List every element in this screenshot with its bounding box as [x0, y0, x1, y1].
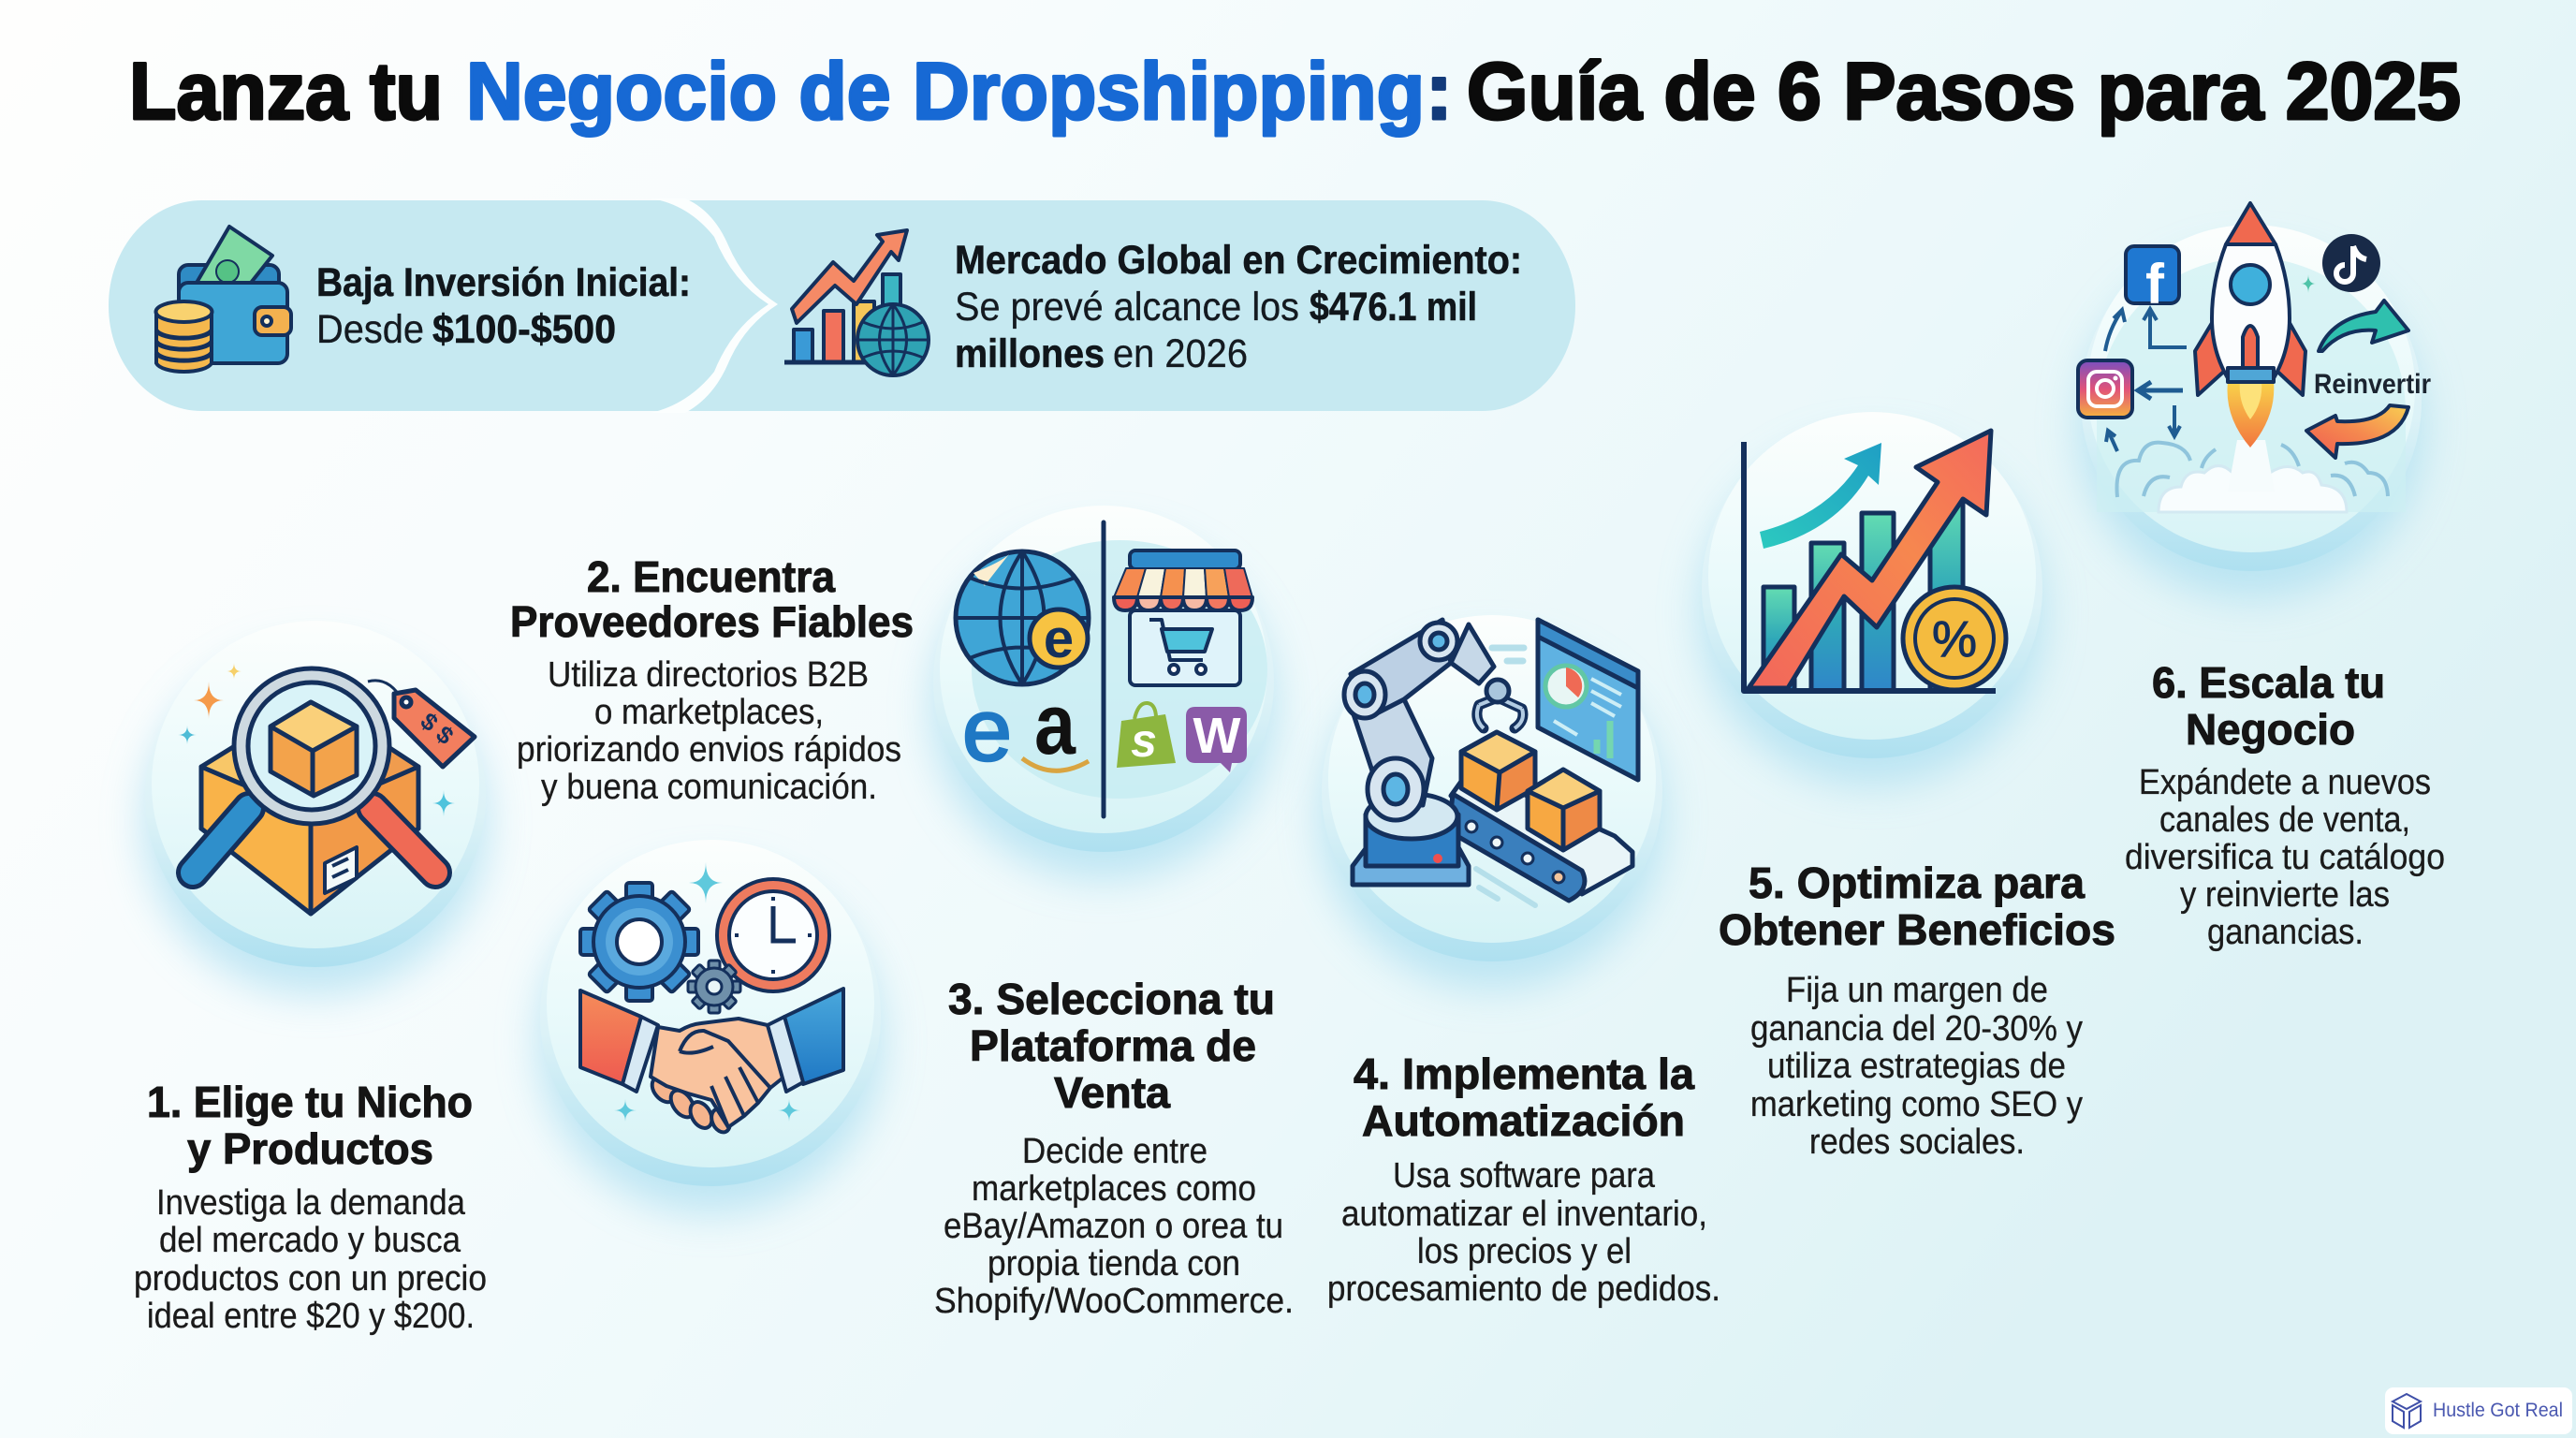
icon: large gear — [580, 883, 698, 1001]
step 1 disc and icon — [143, 621, 488, 994]
logo: Amazon a: a — [1034, 677, 1076, 772]
icon: storefront with cart — [1114, 550, 1252, 685]
icon: cube — [2393, 1394, 2421, 1428]
body: Expándete a nuevos — [2139, 763, 2431, 802]
icon: flame — [2228, 382, 2275, 492]
step 6 disc and icon — [2078, 203, 2431, 598]
watermark badge — [2385, 1387, 2572, 1434]
text: low investment — [316, 260, 691, 352]
body: ideal entre $20 y $200. — [147, 1297, 475, 1336]
heading: 3. Selecciona tu — [948, 975, 1275, 1023]
body: automatizar el inventario, — [1341, 1195, 1707, 1234]
body: y reinvierte las — [2180, 875, 2390, 915]
heading: Negocio — [2186, 705, 2355, 754]
body: Investiga la demanda — [156, 1183, 466, 1223]
logo: WooCommerce: W — [1193, 708, 1241, 764]
text: global market: en 2026 — [1113, 331, 1248, 376]
body: eBay/Amazon o orea tu — [944, 1207, 1283, 1246]
body: marketing como SEO y — [1750, 1085, 2083, 1124]
step 6 text — [2125, 658, 2445, 952]
step 5 disc and icon — [1700, 412, 2044, 785]
dash marks — [1492, 648, 1524, 661]
sparkles — [178, 663, 455, 816]
body: y buena comunicación. — [541, 768, 877, 807]
body: canales de venta, — [2159, 800, 2410, 840]
body — [517, 655, 901, 807]
icon: Instagram — [2078, 360, 2132, 418]
divider — [1101, 522, 1106, 816]
heading: 1. Elige tu Nicho — [147, 1078, 473, 1126]
heading: 5. Optimiza para — [1749, 858, 2085, 907]
icon: conveyor belt — [1449, 770, 1632, 901]
body: Utiliza directorios B2B — [548, 655, 869, 695]
body: del mercado y busca — [159, 1221, 461, 1260]
step 3 text — [934, 975, 1294, 1321]
icon: box, magnifier and price tag — [193, 668, 475, 914]
body — [134, 1183, 487, 1336]
title: Negocio de Dropshipping — [466, 47, 1425, 137]
body: ganancia del 20-30% y — [1750, 1009, 2083, 1049]
price tag symbols: $ $ — [415, 707, 460, 750]
body: Shopify/WooCommerce. — [934, 1282, 1294, 1321]
arrow: red reinvest — [2306, 405, 2408, 458]
icon: Facebook — [2126, 246, 2179, 315]
icon: handshake — [580, 989, 843, 1136]
logo: Shopify bag — [1117, 703, 1176, 768]
stats banner — [109, 198, 1575, 413]
speed lines — [1476, 869, 1535, 905]
title: Lanza tu — [129, 47, 443, 137]
logo: eBay e: e — [962, 681, 1012, 779]
heading: Obtener Beneficios — [1719, 905, 2115, 954]
body: los precios y el — [1417, 1232, 1632, 1271]
heading: Automatización — [1362, 1096, 1685, 1145]
heading — [1354, 1049, 1694, 1145]
body: Fija un margen de — [1786, 971, 2048, 1010]
e badge letter: e — [1044, 609, 1074, 669]
icon: bar chart with arrows and percent coin — [1744, 431, 2006, 691]
heading — [948, 975, 1275, 1117]
title: : — [1426, 47, 1453, 137]
body: marketplaces como — [972, 1169, 1256, 1209]
heading: 6. Escala tu — [2152, 658, 2385, 707]
logo: Shopify bag: s — [1131, 714, 1157, 767]
heading: 4. Implementa la — [1354, 1049, 1694, 1098]
step 5 text — [1719, 858, 2115, 1162]
body: utiliza estrategias de — [1767, 1047, 2066, 1086]
text: global market: Se prevé alcance los — [955, 285, 1299, 330]
icon: rocket — [2195, 203, 2305, 395]
text: low investment: Desde — [316, 307, 424, 352]
icon: dashboard screen — [1538, 620, 1638, 780]
body: Decide entre — [1022, 1132, 1208, 1171]
icon: clock — [717, 879, 829, 991]
body — [934, 1132, 1294, 1321]
text: global market — [955, 238, 1522, 376]
sparkle — [2301, 274, 2316, 293]
icon: wallet with coins — [155, 227, 291, 372]
heading — [2152, 658, 2385, 754]
arrow: teal reinvest — [2319, 301, 2408, 351]
watermark text: Hustle Got Real — [2433, 1400, 2563, 1421]
heading: Plataforma de — [970, 1021, 1256, 1070]
body: Usa software para — [1393, 1156, 1656, 1196]
text: global market: $476.1 mil — [1310, 285, 1477, 330]
title — [129, 47, 2461, 137]
logo: WooCommerce — [1186, 707, 1247, 772]
step 4 disc and icon — [1320, 615, 1664, 989]
text: global market: millones — [955, 331, 1105, 376]
heading: 2. Encuentra — [587, 552, 835, 601]
small flow arrows — [2105, 309, 2187, 451]
body — [2125, 763, 2445, 952]
text: low investment: $100-$500 — [432, 307, 616, 352]
sparkles — [614, 862, 800, 1122]
icon: packages — [1461, 732, 1600, 850]
heading: y Productos — [187, 1124, 433, 1173]
icon: globe with e badge — [956, 551, 1089, 684]
heading: Proveedores Fiables — [510, 597, 914, 646]
body: o marketplaces, — [594, 693, 824, 732]
body: propia tienda con — [988, 1244, 1240, 1284]
reinvest label: Reinvertir — [2314, 369, 2431, 400]
body — [1750, 971, 2083, 1162]
title: Guía de 6 Pasos para 2025 — [1467, 47, 2461, 137]
icon: TikTok — [2322, 234, 2380, 292]
body — [1327, 1156, 1720, 1309]
heading — [147, 1078, 473, 1173]
step 1 text — [134, 1078, 487, 1336]
step 2 disc and icon — [538, 840, 883, 1213]
body: ganancias. — [2207, 913, 2364, 952]
icon: clouds — [2116, 443, 2388, 512]
body: productos con un precio — [134, 1259, 487, 1299]
icon: robot arm — [1344, 620, 1523, 885]
body: procesamiento de pedidos. — [1327, 1269, 1720, 1309]
icon: small gear — [688, 961, 740, 1013]
icon: market chart and globe — [784, 230, 929, 375]
Amazon smile — [1022, 758, 1089, 770]
heading — [510, 552, 914, 646]
body: redes sociales. — [1809, 1123, 2025, 1162]
heading — [1719, 858, 2115, 954]
step 3 disc and icon — [931, 506, 1276, 879]
body: diversifica tu catálogo — [2125, 838, 2445, 877]
text: low investment: Baja Inversión Inicial: — [316, 260, 691, 305]
step 4 text — [1327, 1049, 1720, 1309]
percent sign: % — [1932, 611, 1977, 668]
icon: Facebook: f — [2145, 253, 2165, 315]
text: global market: Mercado Global en Crecimiento: — [955, 238, 1522, 283]
heading: Venta — [1054, 1068, 1170, 1117]
body: priorizando envios rápidos — [517, 730, 901, 770]
step 2 text — [510, 552, 914, 807]
